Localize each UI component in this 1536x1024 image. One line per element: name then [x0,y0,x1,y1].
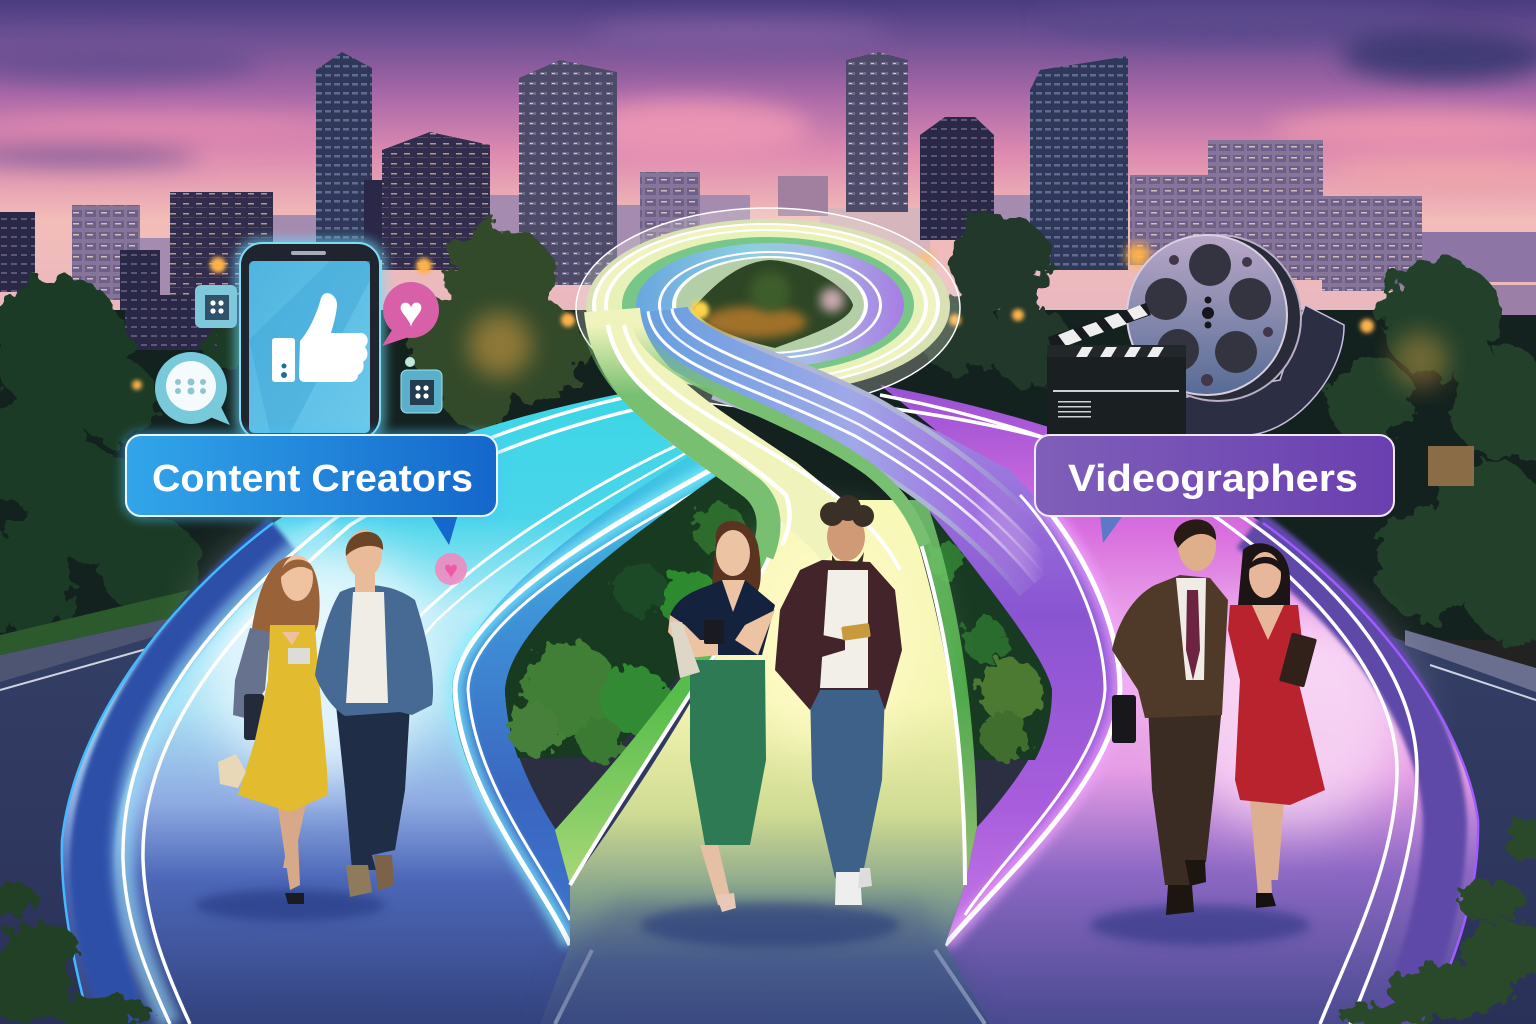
inner band: left ribbon [455,440,732,945]
reel back [1135,235,1301,401]
ribbon: figure-eight loop [576,208,1045,575]
label: Content Creators [122,431,501,545]
loop white lines [658,251,882,359]
garden opening right [905,480,1052,827]
curb right [1405,630,1536,692]
icon: app tile top left [195,285,237,328]
label: Videographers [1035,435,1394,543]
verge left [0,590,190,655]
house with warm window [1428,446,1474,486]
faint lane lines [555,950,592,1024]
clapperboard body [1047,345,1186,436]
foliage: bottom left corner [0,884,152,1024]
icon: small pink heart bubble [435,553,467,585]
man in denim jacket [315,530,433,897]
icon: app tile lower right [401,357,442,413]
pale band into central path [594,310,925,570]
blue band toward right ribbon [660,310,1045,575]
icon: small pink heart bubble: ♥ [444,557,458,584]
film strip tail [1170,305,1344,435]
icon: chat speech bubble [155,352,230,425]
left tree mass [0,277,257,635]
central right trees [920,212,1072,387]
central left trees [406,225,585,431]
man in brown suit [1112,519,1228,915]
loop glass rim [576,208,960,408]
ribbon: central yellow-green path [540,500,990,1024]
couple: centre pair [668,495,902,912]
loop outer pale band [586,219,950,393]
icon: film reel and clapperboard [1047,235,1344,436]
road line right [1430,665,1536,700]
loop blue-violet stripe [636,243,904,367]
foliage: bottom right corner [1337,816,1536,1024]
woman in red dress [1228,543,1325,908]
sky background [0,0,1536,340]
woman in yellow dress [218,555,328,904]
label: Videographers: Videographers [1068,458,1358,500]
distant buildings [140,195,1536,298]
city skyline [0,52,1536,320]
clouds [0,4,1536,187]
icon: heart speech bubble [382,282,439,346]
garden opening left [505,470,770,833]
icon: phone with thumbs up [234,238,386,443]
inner band: right ribbon [830,390,1120,945]
loop green stripe [622,237,914,373]
green wedge right [906,500,977,885]
thumbs up glyph [272,293,368,382]
street lights glow [132,243,1448,390]
loop hole tree view [691,260,853,348]
background tree line [0,212,1536,643]
man with maroon jacket [775,495,902,905]
road line left [0,648,150,690]
ribbon: right violet path [880,385,1478,1024]
people shadows [195,889,1310,947]
icon: heart speech bubble: ♥ [399,288,423,335]
right tree mass [1326,258,1536,643]
label: Content Creators: Content Creators [152,458,473,500]
buildings seen in gaps [125,295,240,350]
curb left [0,618,170,682]
couple: videographers [1112,519,1325,915]
road surface [0,590,1536,1024]
green wedge left [555,500,784,885]
woman in green trousers [668,521,775,912]
road fade [540,900,990,1024]
clapperboard arm [1048,303,1151,352]
couple: content creators [218,530,433,904]
reel face [1127,235,1287,395]
building row [0,212,35,292]
ribbon: left blue path [62,388,725,1024]
